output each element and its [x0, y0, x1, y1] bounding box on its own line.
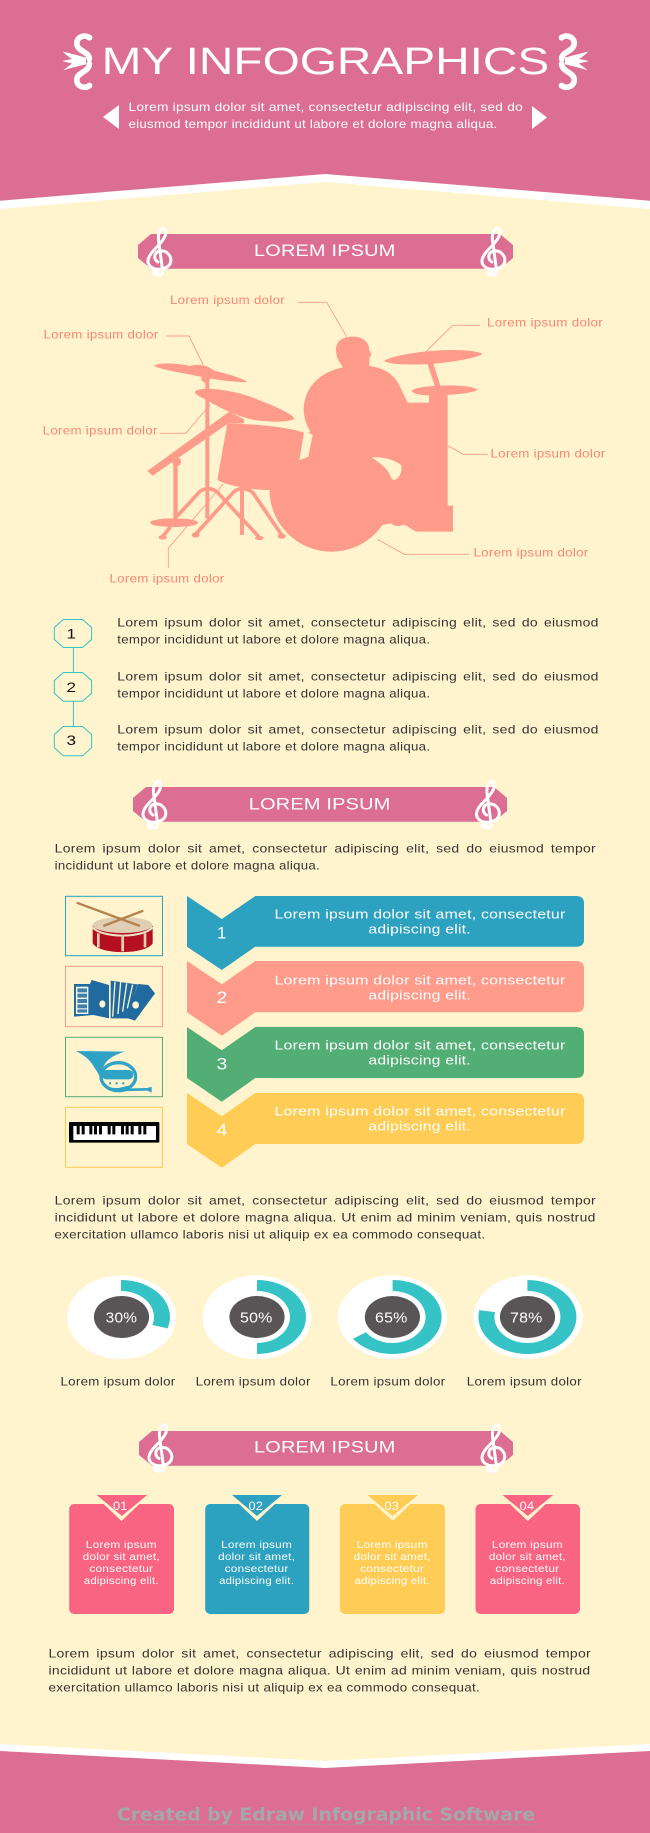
- donut chart 78%: [474, 1275, 582, 1359]
- card 01: Lorem ipsum: [86, 1540, 157, 1551]
- paragraph 3: exercitation ullamco laboris nisi ut aliquip ex ea commodo consequat.: [48, 1682, 480, 1695]
- section banner 3: [139, 1425, 513, 1472]
- item 1 text: Lorem ipsum dolor sit amet, consectetur adipiscing elit, sed do eiusmod: [117, 617, 599, 630]
- icon: right arrow: [532, 106, 547, 129]
- step arrow 2: adipiscing elit.: [368, 987, 471, 1002]
- numbered list: [54, 617, 599, 756]
- chart callout labels: Lorem ipsum dolor: [487, 317, 603, 330]
- subtitle: eiusmod tempor incididunt ut labore et dolore magna aliqua.: [128, 118, 498, 131]
- item 3 text: [117, 724, 599, 754]
- card 03: consectetur: [360, 1564, 425, 1575]
- paragraph 1: [55, 843, 596, 873]
- donut chart labels: Lorem ipsum dolor: [60, 1376, 176, 1389]
- step arrow 4: adipiscing elit.: [368, 1118, 471, 1133]
- step arrow 4: Lorem ipsum dolor sit amet, consectetur: [274, 1103, 566, 1118]
- icon box: accordion: [66, 966, 162, 1027]
- item 2 text: [117, 671, 599, 701]
- paragraph 2: incididunt ut labore et dolore magna aliqua. Ut enim ad minim veniam, quis nostrud: [55, 1212, 596, 1225]
- card 02: Lorem ipsum: [221, 1540, 292, 1551]
- card 01: [69, 1495, 174, 1614]
- chart callout labels: Lorem ipsum dolor: [43, 425, 158, 438]
- card 01: dolor sit amet,: [83, 1552, 160, 1563]
- card 02: dolor sit amet,: [218, 1552, 295, 1563]
- section banner 3: LOREM IPSUM: [254, 1438, 396, 1457]
- icon: left ornament: [62, 35, 92, 89]
- drummer body and right cymbals: [297, 337, 482, 532]
- header band: [0, 0, 650, 209]
- step arrow 1: 1: [217, 923, 226, 942]
- card 03: Lorem ipsum: [357, 1540, 428, 1551]
- donut chart labels: [60, 1376, 582, 1389]
- footer band: [0, 1744, 650, 1833]
- paragraph 2: [54, 1195, 596, 1242]
- chart callout labels: Lorem ipsum dolor: [490, 448, 606, 461]
- card 03: adipiscing elit.: [355, 1576, 430, 1587]
- section banner 1: LOREM IPSUM: [254, 241, 396, 260]
- item 1 text: [117, 617, 599, 647]
- item 2 text: Lorem ipsum dolor sit amet, consectetur adipiscing elit, sed do eiusmod: [117, 671, 599, 684]
- step arrow 1: Lorem ipsum dolor sit amet, consectetur: [274, 906, 566, 921]
- paragraph 3: incididunt ut labore et dolore magna aliqua. Ut enim ad minim veniam, quis nostrud: [48, 1665, 590, 1678]
- card 02: adipiscing elit.: [219, 1576, 294, 1587]
- item 1 number: 1: [66, 625, 76, 641]
- item 3 number: 3: [66, 732, 76, 748]
- item 3 text: tempor incididunt ut labore et dolore magna aliqua.: [117, 741, 430, 754]
- paragraph 3: [48, 1648, 591, 1695]
- card 04: [476, 1495, 580, 1614]
- step arrow 3: [187, 1027, 584, 1102]
- icon: left arrow: [103, 105, 119, 129]
- footer credit: Created by Edraw Infographic Software: [117, 1806, 535, 1826]
- donut chart 50%: 50%: [240, 1309, 272, 1326]
- step arrow 3: 3: [216, 1054, 228, 1073]
- step arrow 2: [187, 961, 584, 1036]
- card 03: 03: [384, 1500, 399, 1513]
- card 04: Lorem ipsum: [492, 1540, 563, 1551]
- step arrow 2: Lorem ipsum dolor sit amet, consectetur: [274, 972, 566, 987]
- item 2 text: tempor incididunt ut labore et dolore magna aliqua.: [117, 688, 430, 701]
- card 04: dolor sit amet,: [489, 1552, 566, 1563]
- donut chart labels: Lorem ipsum dolor: [467, 1376, 582, 1389]
- chart callout labels: Lorem ipsum dolor: [170, 294, 285, 307]
- donut chart 78%: 78%: [510, 1309, 542, 1326]
- card 02: consectetur: [225, 1564, 289, 1575]
- item 3 text: Lorem ipsum dolor sit amet, consectetur adipiscing elit, sed do eiusmod: [117, 724, 599, 737]
- item 3 number: [54, 726, 92, 756]
- item 2 number: [54, 672, 92, 701]
- section banner 2: LOREM IPSUM: [249, 795, 390, 814]
- step arrow 1: adipiscing elit.: [368, 921, 471, 936]
- chart callout labels: Lorem ipsum dolor: [110, 573, 224, 586]
- section banner 1: [138, 228, 513, 276]
- step arrow 3: adipiscing elit.: [368, 1052, 471, 1067]
- card 04: 04: [520, 1500, 535, 1513]
- donut chart 65%: 65%: [375, 1309, 408, 1326]
- icon box: piano keyboard: [66, 1107, 162, 1167]
- donut chart 50%: [202, 1275, 312, 1359]
- cymbals, stands and tom drum: [147, 364, 294, 540]
- item 2 number: 2: [66, 679, 76, 695]
- donut chart labels: Lorem ipsum dolor: [196, 1376, 311, 1389]
- step arrow 1: [187, 896, 584, 970]
- item 1 text: tempor incididunt ut labore et dolore magna aliqua.: [117, 634, 430, 647]
- donut chart 65%: [338, 1275, 447, 1359]
- donut chart labels: Lorem ipsum dolor: [330, 1376, 445, 1389]
- card 02: [205, 1495, 309, 1614]
- subtitle: [128, 101, 523, 131]
- card 03: dolor sit amet,: [354, 1552, 431, 1563]
- card 04: adipiscing elit.: [490, 1576, 565, 1587]
- card 03: [340, 1495, 445, 1614]
- subtitle: Lorem ipsum dolor sit amet, consectetur adipiscing elit, sed do: [128, 101, 523, 114]
- card 01: 01: [113, 1500, 128, 1513]
- section banner 2: [133, 781, 507, 829]
- step arrow 4: [187, 1093, 584, 1168]
- icon box: french horn: [66, 1037, 162, 1097]
- step arrow 3: Lorem ipsum dolor sit amet, consectetur: [274, 1037, 566, 1052]
- paragraph 2: exercitation ullamco laboris nisi ut aliquip ex ea commodo consequat.: [54, 1229, 485, 1242]
- chart callout labels: [43, 294, 605, 586]
- donut chart 30%: [67, 1275, 176, 1359]
- paragraph 1: incididunt ut labore et dolore magna aliqua.: [55, 860, 320, 873]
- tom drum: [217, 423, 304, 490]
- chart callout labels: Lorem ipsum dolor: [474, 547, 588, 560]
- icon: right ornament: [559, 35, 589, 89]
- card 01: consectetur: [89, 1564, 154, 1575]
- donut chart 30%: 30%: [106, 1309, 137, 1326]
- chart: drummer silhouette: [147, 337, 482, 552]
- item 1 number: [54, 620, 92, 648]
- card 02: 02: [248, 1500, 263, 1513]
- step arrow 2: 2: [216, 988, 228, 1007]
- step arrow 4: 4: [216, 1120, 228, 1139]
- icon: bass drum: [270, 428, 394, 552]
- card 01: adipiscing elit.: [84, 1576, 159, 1587]
- chart callout leader lines: [160, 302, 488, 568]
- paragraph 1: Lorem ipsum dolor sit amet, consectetur adipiscing elit, sed do eiusmod tempor: [55, 843, 596, 856]
- card 04: consectetur: [495, 1564, 560, 1575]
- chart callout labels: Lorem ipsum dolor: [44, 329, 158, 342]
- paragraph 2: Lorem ipsum dolor sit amet, consectetur adipiscing elit, sed do eiusmod tempor: [55, 1195, 596, 1208]
- icon box: drum: [66, 896, 162, 956]
- paragraph 3: Lorem ipsum dolor sit amet, consectetur adipiscing elit, sed do eiusmod tempor: [48, 1648, 591, 1661]
- title: MY INFOGRAPHICS: [102, 41, 549, 83]
